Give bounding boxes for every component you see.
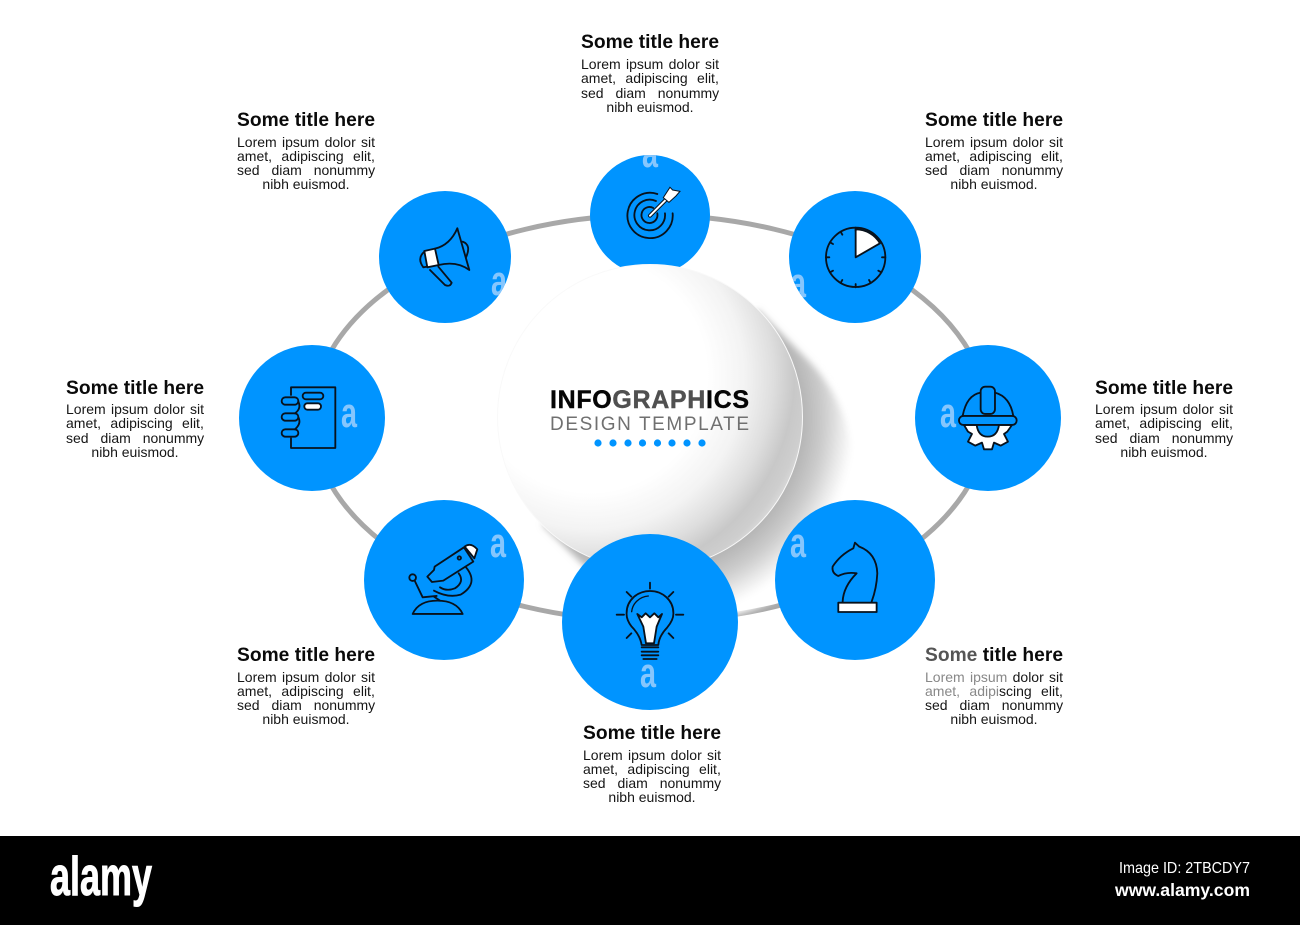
icon: notebook — [282, 387, 335, 448]
icon: megaphone — [420, 228, 469, 286]
text block: lower right — [925, 645, 1063, 727]
connecting ellipse ring — [312, 215, 988, 621]
node: clock: a — [790, 259, 806, 306]
node: chess knight: a — [790, 519, 806, 566]
text block: left: Some title here — [66, 378, 204, 399]
text block: upper left: Lorem ipsum dolor sit — [237, 134, 375, 150]
subtitle: design template: DESIGN TEMPLATE — [550, 414, 749, 435]
node: light bulb — [562, 534, 738, 710]
text block: lower left: Lorem ipsum dolor sit — [237, 669, 375, 685]
node: helmet — [915, 345, 1061, 491]
text block: left: sed diam nonummy — [66, 430, 204, 446]
text block: top — [581, 32, 719, 115]
text block: top: amet, adipiscing elit, — [581, 70, 719, 86]
icon: microscope — [409, 545, 477, 614]
text block: upper left — [237, 110, 375, 192]
text block: lower right: nibh euismod. — [950, 711, 1038, 727]
image id: Image ID: 2TBCDY7 — [1119, 860, 1250, 877]
text block: upper left: Some title here — [237, 110, 375, 131]
text block: upper left: nibh euismod. — [262, 176, 350, 192]
text block: lower left: sed diam nonummy — [237, 697, 375, 713]
text block: upper right: nibh euismod. — [950, 176, 1038, 192]
node: clock — [789, 191, 921, 323]
icon: light bulb — [617, 583, 683, 659]
text block: top: Lorem ipsum dolor sit — [581, 56, 719, 72]
text block: right: nibh euismod. — [1120, 444, 1208, 460]
website: www.alamy.com — [1114, 880, 1250, 900]
text block: bottom: Some title here — [583, 723, 721, 744]
text block: left: amet, adipiscing elit, — [66, 415, 204, 431]
footer bar — [0, 836, 1300, 925]
text block: bottom: sed diam nonummy — [583, 775, 721, 791]
text block: right: Lorem ipsum dolor sit — [1095, 401, 1233, 417]
text block: lower left: Some title here — [237, 645, 375, 666]
text block: lower right: Some title here — [925, 645, 1063, 666]
text block: upper right: amet, adipiscing elit, — [925, 148, 1063, 164]
text block: left — [66, 378, 204, 460]
text block: bottom: amet, adipiscing elit, — [583, 761, 721, 777]
icon: clock — [826, 228, 885, 287]
shadow of central sphere — [542, 310, 852, 619]
title: infographics: INFOGRAPHICS — [550, 386, 749, 414]
text block: upper right — [925, 110, 1063, 192]
node: microscope — [364, 500, 524, 660]
text block: lower right: sed diam nonummy — [925, 697, 1063, 713]
node: light bulb: a — [640, 649, 656, 696]
node: target — [590, 155, 710, 267]
text block: bottom — [583, 723, 721, 805]
icon: chess knight — [833, 543, 877, 612]
node: microscope: a — [490, 519, 506, 566]
text block: lower right: Lorem ipsum dolor sit — [925, 669, 1063, 685]
node: megaphone — [379, 191, 511, 323]
icon: helmet with gear — [959, 387, 1017, 449]
node: notebook: a — [341, 389, 357, 436]
text block: right — [1095, 378, 1233, 460]
text block: right: sed diam nonummy — [1095, 430, 1233, 446]
text block: right: amet, adipiscing elit, — [1095, 415, 1233, 431]
text block: upper right: Some title here — [925, 110, 1063, 131]
node: helmet: a — [940, 389, 956, 436]
text block: left: nibh euismod. — [91, 444, 179, 460]
node: target: a — [642, 129, 658, 176]
text block: upper left: amet, adipiscing elit, — [237, 148, 375, 164]
text block: bottom: nibh euismod. — [608, 789, 696, 805]
node: notebook — [239, 345, 385, 491]
text block: top: nibh euismod. — [606, 99, 694, 115]
text block: lower left — [237, 645, 375, 727]
text block: upper left: sed diam nonummy — [237, 162, 375, 178]
text block: right: Some title here — [1095, 378, 1233, 399]
center heading — [550, 386, 749, 447]
text block: top: Some title here — [581, 32, 719, 53]
text block: top: sed diam nonummy — [581, 85, 719, 101]
text block: bottom: Lorem ipsum dolor sit — [583, 747, 721, 763]
text block: lower left: nibh euismod. — [262, 711, 350, 727]
text block: left: Lorem ipsum dolor sit — [66, 401, 204, 417]
row of dots — [594, 439, 706, 447]
node: megaphone: a — [491, 257, 507, 304]
footer logo: alamy — [50, 845, 152, 907]
node: chess knight — [775, 500, 935, 660]
text block: lower left: amet, adipiscing elit, — [237, 683, 375, 699]
central sphere — [498, 264, 802, 570]
icon: target with arrow — [627, 187, 680, 238]
text block: upper right: Lorem ipsum dolor sit — [925, 134, 1063, 150]
text block: lower right: amet, adipiscing elit, — [925, 683, 1063, 699]
text block: upper right: sed diam nonummy — [925, 162, 1063, 178]
